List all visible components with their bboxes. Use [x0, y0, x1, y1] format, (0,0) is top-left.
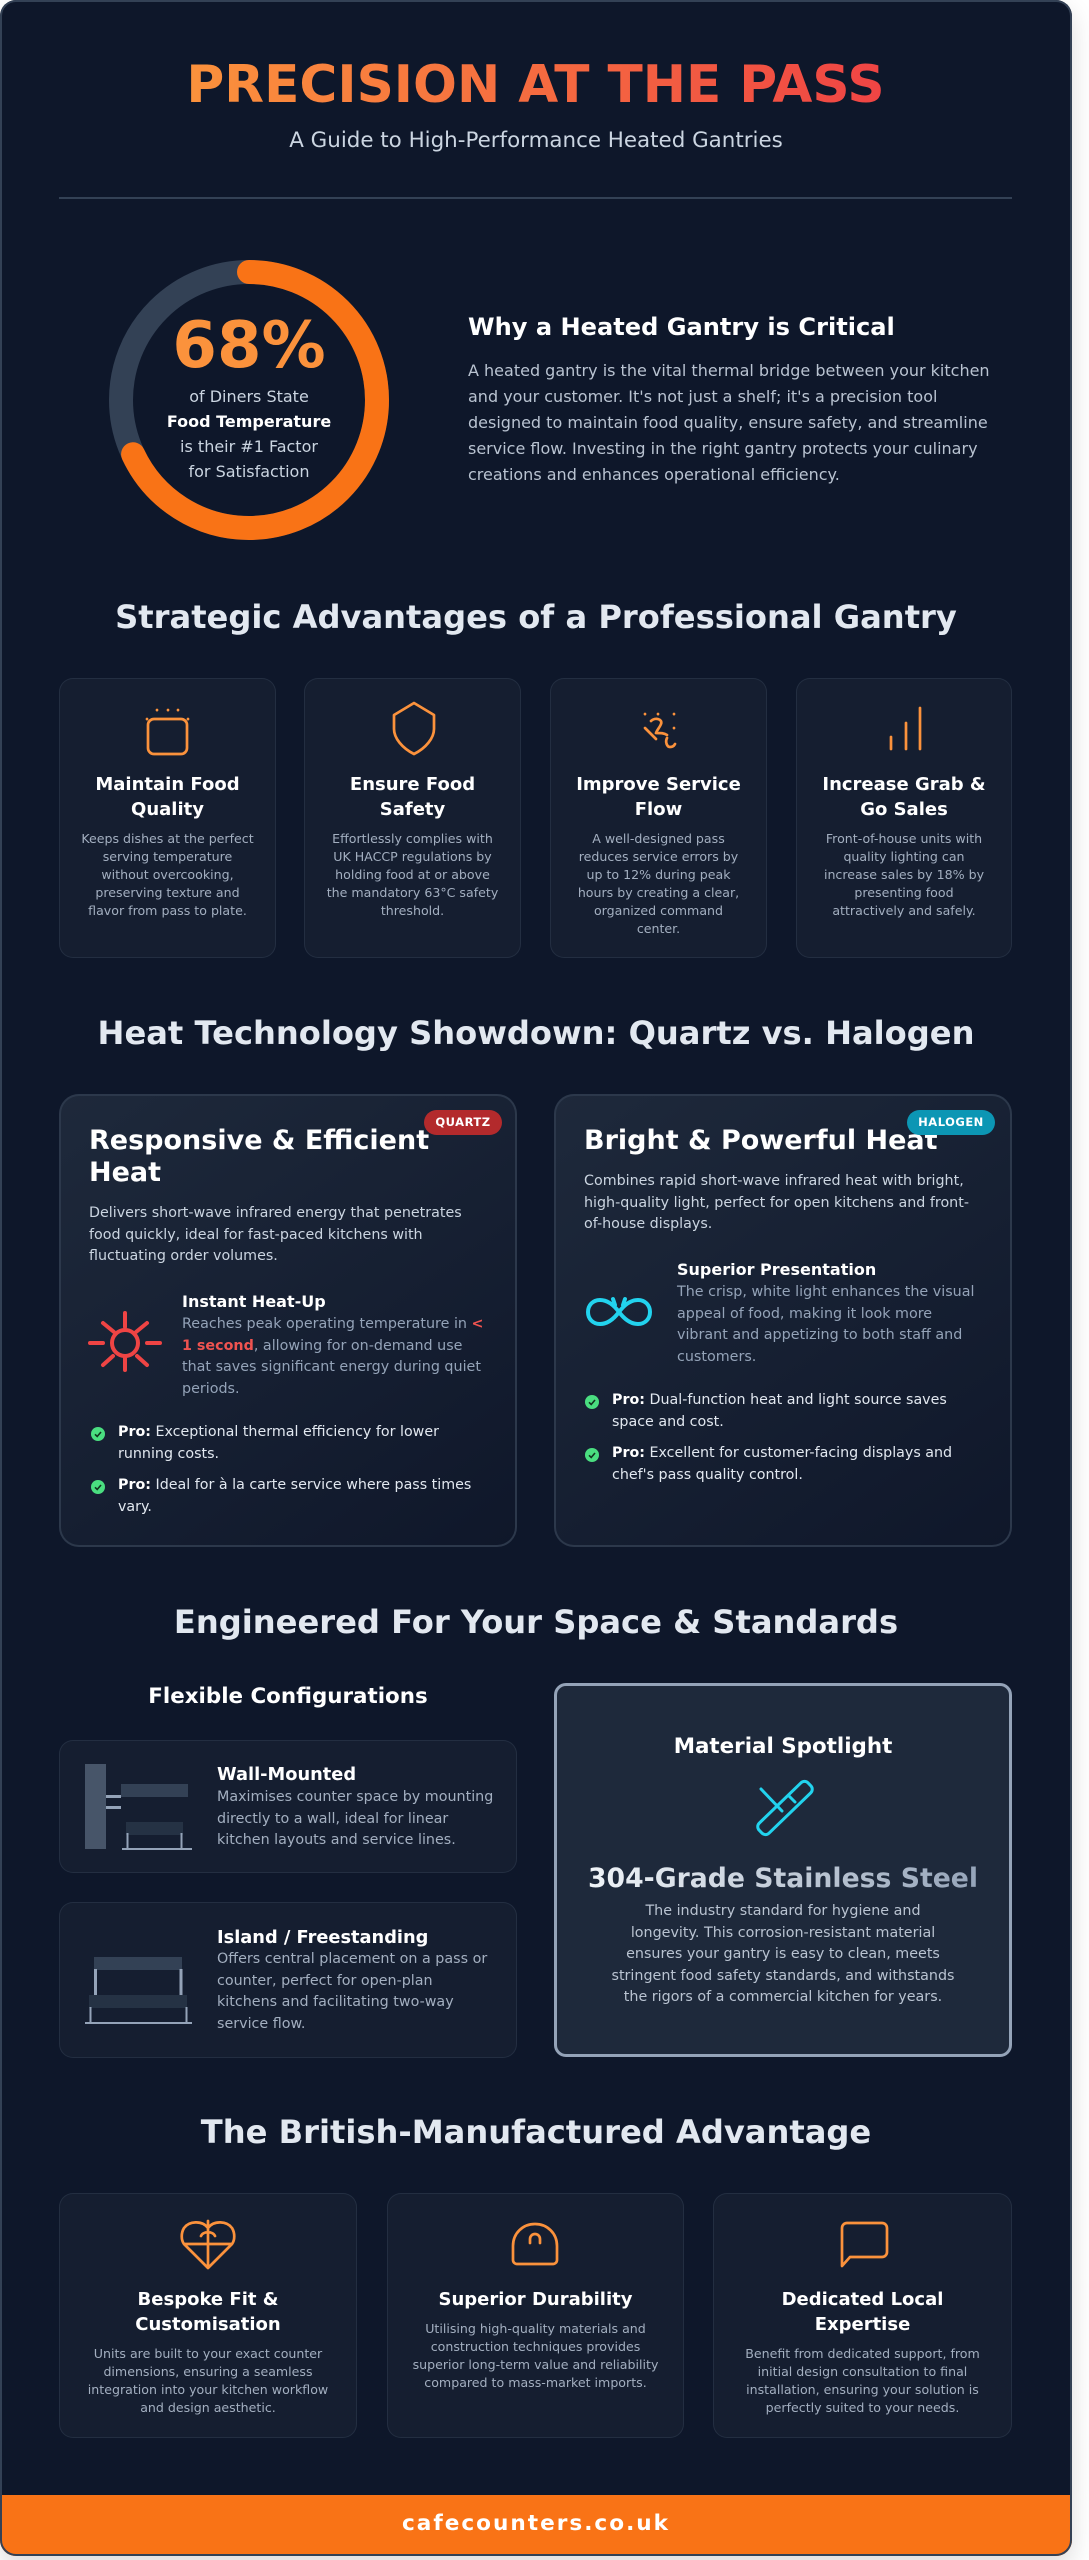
description: food quickly, ideal for fast-paced kitchens with — [89, 1227, 423, 1243]
pro text — [118, 1424, 439, 1462]
description: fluctuating order volumes. — [89, 1248, 278, 1264]
badge: quartz: QUARTZ — [435, 1115, 491, 1129]
paragraph: A heated gantry is the vital thermal bridge between your kitchen — [468, 361, 990, 380]
card body: increase sales by 18% by — [824, 867, 984, 882]
icon: wall-mounted diagram — [85, 1764, 192, 1850]
card body: Effortlessly complies with — [332, 831, 493, 846]
card title: Go Sales — [860, 799, 948, 820]
card body: UK HACCP regulations by — [333, 849, 492, 864]
card body: initial design consultation to final — [758, 2364, 967, 2379]
card body: serving temperature — [103, 849, 232, 864]
icon: heart — [178, 2219, 238, 2271]
paragraph: service flow. Investing in the right gantry protects your culinary — [468, 439, 978, 458]
card body: without overcooking, — [101, 867, 234, 882]
card body: presenting food — [854, 885, 954, 900]
card body: reduces service errors by — [579, 849, 738, 864]
pro text: running costs. — [118, 1446, 219, 1462]
section heading: british manufactured: The British-Manufactured Advantage — [201, 2113, 871, 2151]
stat caption: of Diners State — [189, 387, 309, 406]
panel: maintain food quality — [59, 678, 276, 958]
card body: A well-designed pass — [592, 831, 725, 846]
card body: attractively and safely. — [832, 903, 976, 918]
card title — [822, 774, 986, 820]
card body: quality lighting can — [843, 849, 965, 864]
panel: material spotlight — [554, 1683, 1012, 2057]
card body — [387, 2320, 684, 2392]
heading: Island / Freestanding — [217, 1927, 428, 1948]
card title: Ensure Food — [350, 774, 475, 795]
donut stat: 68% of diners — [109, 260, 389, 540]
card title: Expertise — [815, 2314, 910, 2335]
text: Maximises counter space by mounting — [217, 1789, 493, 1805]
card title: Bespoke Fit & — [138, 2289, 278, 2310]
title: PRECISION AT THE PASS — [186, 55, 885, 115]
feature text: The crisp, white light enhances the visual — [677, 1284, 974, 1300]
feature text: Reaches peak operating temperature in < — [182, 1316, 484, 1332]
card title: Safety — [380, 799, 445, 820]
stat caption — [167, 387, 331, 481]
footer bar — [0, 2495, 1072, 2556]
panel: local expertise — [713, 2193, 1012, 2438]
card title: Dedicated Local — [782, 2289, 943, 2310]
icon: knife — [755, 1776, 817, 1840]
section heading: strategic advantages: Strategic Advantages of a Professional Gantry — [115, 598, 957, 636]
card body: compared to mass-market imports. — [424, 2375, 647, 2390]
panel: improve service flow — [550, 678, 767, 958]
text: kitchens and facilitating two-way — [217, 1994, 454, 2010]
heading: Heat — [89, 1157, 161, 1188]
pro item 1 — [585, 1392, 947, 1430]
feature: instant heat-up — [182, 1292, 484, 1397]
panel: superior durability — [387, 2193, 684, 2438]
description — [584, 1173, 969, 1232]
card body: organized command — [594, 903, 723, 918]
text — [217, 1949, 487, 2035]
heading: Material Spotlight — [674, 1734, 892, 1759]
description: stringent food safety standards, and withstands — [612, 1968, 954, 1984]
heading: Bright & Powerful Heat — [584, 1125, 938, 1156]
card body — [713, 2345, 1012, 2417]
panel: halogen — [554, 1094, 1012, 1547]
description: Combines rapid short-wave infrared heat with bright, — [584, 1173, 964, 1189]
feature text: that saves significant energy during quiet — [182, 1359, 481, 1375]
panel: wall-mounted — [59, 1740, 517, 1873]
feature text: periods. — [182, 1381, 240, 1397]
card title: Maintain Food — [95, 774, 240, 795]
card body — [327, 831, 498, 918]
subtitle: A Guide to High-Performance Heated Gantries — [289, 128, 783, 153]
pro text — [612, 1445, 952, 1483]
paragraph: creations and enhances operational efficiency. — [468, 465, 840, 484]
panel: ensure food safety — [304, 678, 521, 958]
footer url: cafecounters.co.uk — [402, 2511, 670, 2536]
panel: bespoke fit — [59, 2193, 357, 2438]
card title: Quality — [131, 799, 204, 820]
card body: Utilising high-quality materials and — [425, 2321, 646, 2336]
section heading: heat technology: Heat Technology Showdown: Quartz vs. Halogen — [98, 1014, 974, 1052]
icon: service flow — [644, 712, 676, 748]
check icon — [91, 1427, 105, 1441]
feature text: appeal of food, making it look more — [677, 1306, 932, 1322]
icon: bar chart — [890, 706, 922, 750]
card body: construction techniques provides — [431, 2339, 640, 2354]
icon: dome — [510, 2221, 560, 2267]
card body — [59, 2345, 357, 2417]
donut chart ring — [109, 260, 389, 540]
card body — [578, 831, 739, 936]
text: directly to a wall, ideal for linear — [217, 1811, 448, 1827]
card body: Keeps dishes at the perfect — [81, 831, 254, 846]
description — [89, 1205, 462, 1264]
check icon — [585, 1395, 599, 1409]
card body: Units are built to your exact counter — [94, 2346, 322, 2361]
card body: installation, ensuring your solution is — [746, 2382, 979, 2397]
pro text: vary. — [118, 1499, 152, 1515]
text: counter, perfect for open-plan — [217, 1973, 433, 1989]
badge: halogen — [907, 1110, 995, 1135]
material name: 304-Grade Stainless Steel — [588, 1863, 978, 1894]
pro item 2 — [91, 1477, 471, 1515]
description: ensures your gantry is easy to clean, meets — [626, 1946, 940, 1962]
why a heated gantry text block — [468, 313, 990, 484]
card title: Improve Service — [576, 774, 741, 795]
card body: and design aesthetic. — [140, 2400, 276, 2415]
heading — [89, 1125, 429, 1188]
paragraph: designed to maintain food quality, ensure safety, and streamline — [468, 413, 988, 432]
card body: threshold. — [381, 903, 444, 918]
subheading: flexible configurations: Flexible Configurations — [148, 1684, 428, 1709]
feature title: Superior Presentation — [677, 1260, 876, 1279]
card title: Increase Grab & — [822, 774, 986, 795]
heading: Wall-Mounted — [217, 1764, 356, 1785]
card body: preserving texture and — [95, 885, 240, 900]
pro item 1 — [91, 1424, 439, 1462]
text: service flow. — [217, 2016, 305, 2032]
card title — [95, 774, 240, 820]
pro text: Pro: Ideal for à la carte service where pass times — [118, 1477, 471, 1493]
pro text: Pro: Excellent for customer-facing displays and — [612, 1445, 952, 1461]
card body: holding food at or above — [335, 867, 490, 882]
description: Delivers short-wave infrared energy that penetrates — [89, 1205, 462, 1221]
icon: warming dish — [146, 708, 190, 756]
card body: dimensions, ensuring a seamless — [103, 2364, 313, 2379]
card body: superior long-term value and reliability — [413, 2357, 658, 2372]
stat caption: Food Temperature — [167, 412, 331, 431]
card body: the mandatory 63°C safety — [327, 885, 498, 900]
stat number: 68% — [172, 309, 326, 383]
description: longevity. This corrosion-resistant material — [631, 1925, 935, 1941]
description: The industry standard for hygiene and — [645, 1903, 921, 1919]
paragraph — [468, 361, 990, 484]
description: the rigors of a commercial kitchen for years. — [624, 1989, 942, 2005]
card title — [350, 774, 475, 820]
check icon — [585, 1448, 599, 1462]
paragraph: and your customer. It's not just a shelf; it's a precision tool — [468, 387, 937, 406]
description: high-quality light, perfect for open kitchens and front- — [584, 1195, 969, 1211]
icon: island diagram — [85, 1957, 193, 2024]
feature text: vibrant and appetizing to both staff and — [677, 1327, 962, 1343]
feature title: Instant Heat-Up — [182, 1292, 326, 1311]
card title — [576, 774, 741, 820]
badge: halogen: HALOGEN — [918, 1115, 984, 1129]
description — [557, 1901, 1009, 2009]
icon: sun heat — [88, 1311, 162, 1372]
description: of-house displays. — [584, 1216, 712, 1232]
badge: quartz — [424, 1110, 502, 1135]
text — [217, 1789, 493, 1848]
text: kitchen layouts and service lines. — [217, 1832, 456, 1848]
pro text: Pro: Exceptional thermal efficiency for lower — [118, 1424, 439, 1440]
feature: superior presentation — [676, 1260, 974, 1365]
icon: shield — [392, 702, 436, 756]
card title: Flow — [635, 799, 682, 820]
panel: quartz — [59, 1094, 517, 1547]
card body — [81, 831, 254, 918]
card title: Superior Durability — [439, 2289, 632, 2310]
feature text: 1 second, allowing for on-demand use — [182, 1338, 462, 1354]
card body: integration into your kitchen workflow — [88, 2382, 328, 2397]
pro text: chef's pass quality control. — [612, 1467, 803, 1483]
pro text — [612, 1392, 947, 1430]
card body — [824, 831, 984, 918]
card body: flavor from pass to plate. — [88, 903, 247, 918]
card body: center. — [637, 921, 680, 936]
stat caption: is their #1 Factor — [180, 437, 318, 456]
card title: Customisation — [135, 2314, 281, 2335]
check icon — [91, 1480, 105, 1494]
card title — [713, 2287, 1012, 2337]
icon: speech bubble — [839, 2219, 889, 2269]
card body: perfectly suited to your needs. — [766, 2400, 959, 2415]
icon: infinity light — [586, 1297, 652, 1326]
card body: Front-of-house units with — [826, 831, 982, 846]
feature text — [676, 1284, 974, 1365]
feature text: customers. — [677, 1349, 756, 1365]
pro text: Pro: Dual-function heat and light source saves — [612, 1392, 947, 1408]
stat caption: for Satisfaction — [188, 462, 309, 481]
heading: Responsive & Efficient — [89, 1125, 429, 1156]
text: Offers central placement on a pass or — [217, 1951, 487, 1967]
card body: Benefit from dedicated support, from — [745, 2346, 980, 2361]
card title — [59, 2287, 357, 2337]
heading: Why a Heated Gantry is Critical — [468, 313, 895, 341]
section heading: engineered: Engineered For Your Space & Standards — [174, 1603, 898, 1641]
pro item 2 — [585, 1445, 952, 1483]
feature text — [182, 1316, 484, 1397]
pro text — [118, 1477, 471, 1515]
card body: hours by creating a clear, — [578, 885, 739, 900]
panel: increase grab and go sales — [796, 678, 1012, 958]
panel: island freestanding — [59, 1902, 517, 2058]
card body: up to 12% during peak — [586, 867, 730, 882]
pro text: space and cost. — [612, 1414, 724, 1430]
